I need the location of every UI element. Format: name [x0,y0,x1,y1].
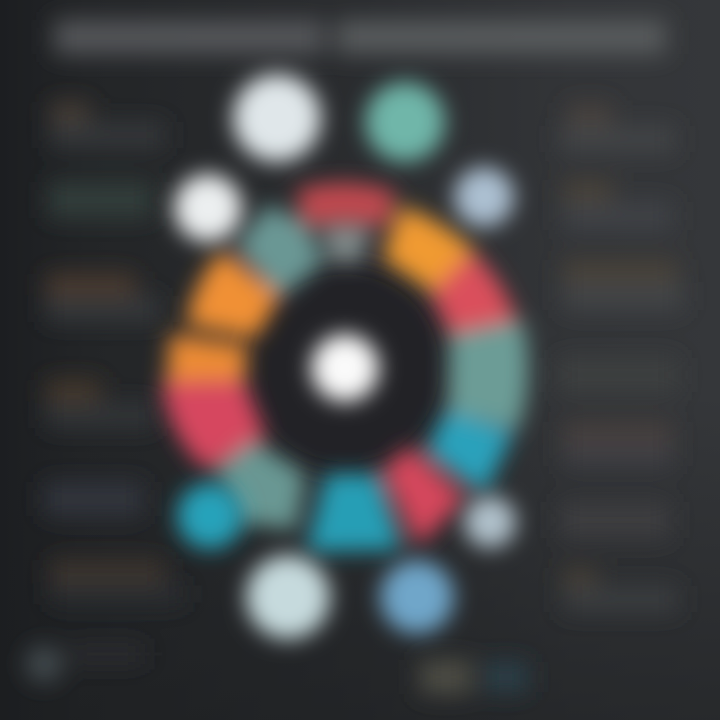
segment: upper-right orange [382,206,474,292]
bottom left icon and text [26,646,145,682]
lower-left cyan circle [177,483,243,549]
segment: lower-right cyan [426,410,514,494]
right item 6 [560,502,670,538]
right item 2 [563,180,673,230]
title [54,20,666,54]
right item 3 [563,260,683,310]
top white circle [233,74,321,162]
segment: right teal [448,320,528,430]
right item 1 [560,104,675,152]
top teal circle [365,82,445,162]
bottom blue circle [380,560,454,634]
segment: lower-left teal [216,440,306,530]
bottom right legend [420,660,528,694]
segment: top red [296,182,396,228]
lower-right pale circle [464,496,516,548]
segment: left orange [166,334,248,386]
left item 6 [50,560,185,604]
upper-left white circle [174,174,242,242]
segment: bottom cyan [306,474,402,552]
left item 1 [50,102,165,148]
segment: bottom red [382,446,466,546]
bottom pale circle [246,555,330,639]
left column text blocks [26,102,185,682]
small light wedge at top of hub [322,226,370,262]
segment: upper-right red [426,246,516,334]
left item 2 [48,182,153,218]
segment: upper-left orange [186,250,280,338]
center white circle [311,334,379,402]
right column text blocks [558,104,683,612]
upper-right pale blue circle [454,167,514,227]
left item 3 [46,274,161,322]
right item 7 [563,568,678,612]
segment: top-left teal [236,204,324,298]
left item 4 [46,380,156,428]
donut ring segments [162,182,528,552]
left item 5 [44,482,144,516]
right item 4 [558,358,678,392]
dark hub [239,262,451,474]
segment: left red [162,380,266,470]
right item 5 [563,422,673,466]
